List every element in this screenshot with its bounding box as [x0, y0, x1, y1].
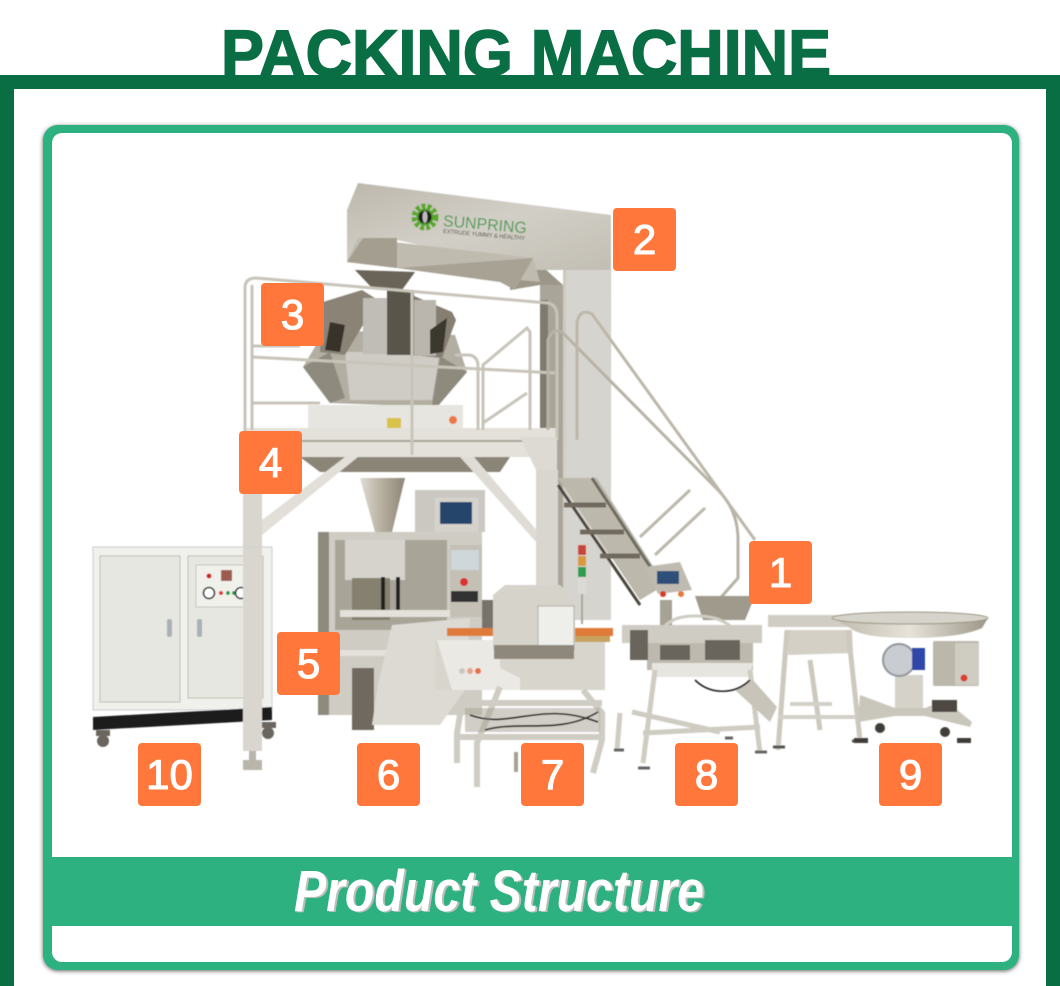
badge 2	[613, 208, 676, 271]
green caption band	[52, 857, 1012, 926]
machine illustration	[93, 183, 988, 787]
platform	[245, 428, 557, 472]
overhead hopper with logo	[347, 183, 611, 290]
badge 5	[277, 632, 340, 695]
vertical packing machine	[318, 532, 494, 730]
badge 10: 10	[146, 751, 193, 798]
forming cone and top screen	[360, 478, 485, 532]
badge 1	[749, 541, 812, 604]
stack light	[578, 545, 586, 624]
cabinet	[93, 547, 276, 751]
badge 7: 7	[541, 751, 564, 798]
badge 8: 8	[695, 751, 718, 798]
stairs	[558, 478, 665, 605]
badge 6: 6	[377, 751, 400, 798]
column	[510, 215, 611, 620]
rotary collecting table	[832, 612, 988, 743]
logo text: SUNPRING	[442, 213, 527, 237]
outfeed table	[768, 615, 866, 750]
badge 9: 9	[899, 751, 922, 798]
multihead weigher	[303, 270, 467, 430]
panel: product structure card	[43, 125, 1019, 970]
badge 6	[357, 743, 420, 806]
badge 2: 2	[633, 216, 656, 263]
badge 5: 5	[297, 640, 320, 687]
badge 3: 3	[281, 291, 304, 338]
badge 9	[879, 743, 942, 806]
caption: Product Structure: Product Structure	[294, 859, 704, 924]
support frame	[243, 437, 558, 770]
feed bowl	[695, 596, 755, 620]
badge 4	[239, 431, 302, 494]
product chute	[372, 618, 470, 725]
title: PACKING MACHINE	[221, 16, 831, 90]
badge 7	[521, 743, 584, 806]
badge 10	[138, 743, 201, 806]
detector head	[493, 585, 575, 659]
badge 4: 4	[259, 439, 282, 486]
conveyor table	[457, 687, 602, 787]
badge 3	[261, 283, 324, 346]
metal detector conveyor	[435, 585, 613, 787]
logo text: EXTRUDE YUMMY & HEALTHY	[443, 229, 525, 242]
logo gear	[414, 206, 436, 228]
checkweigher	[614, 562, 777, 768]
table casters	[854, 723, 971, 743]
railings	[245, 278, 755, 612]
cabinet casters	[96, 722, 276, 747]
badge 8	[675, 743, 738, 806]
badge 1: 1	[769, 549, 792, 596]
